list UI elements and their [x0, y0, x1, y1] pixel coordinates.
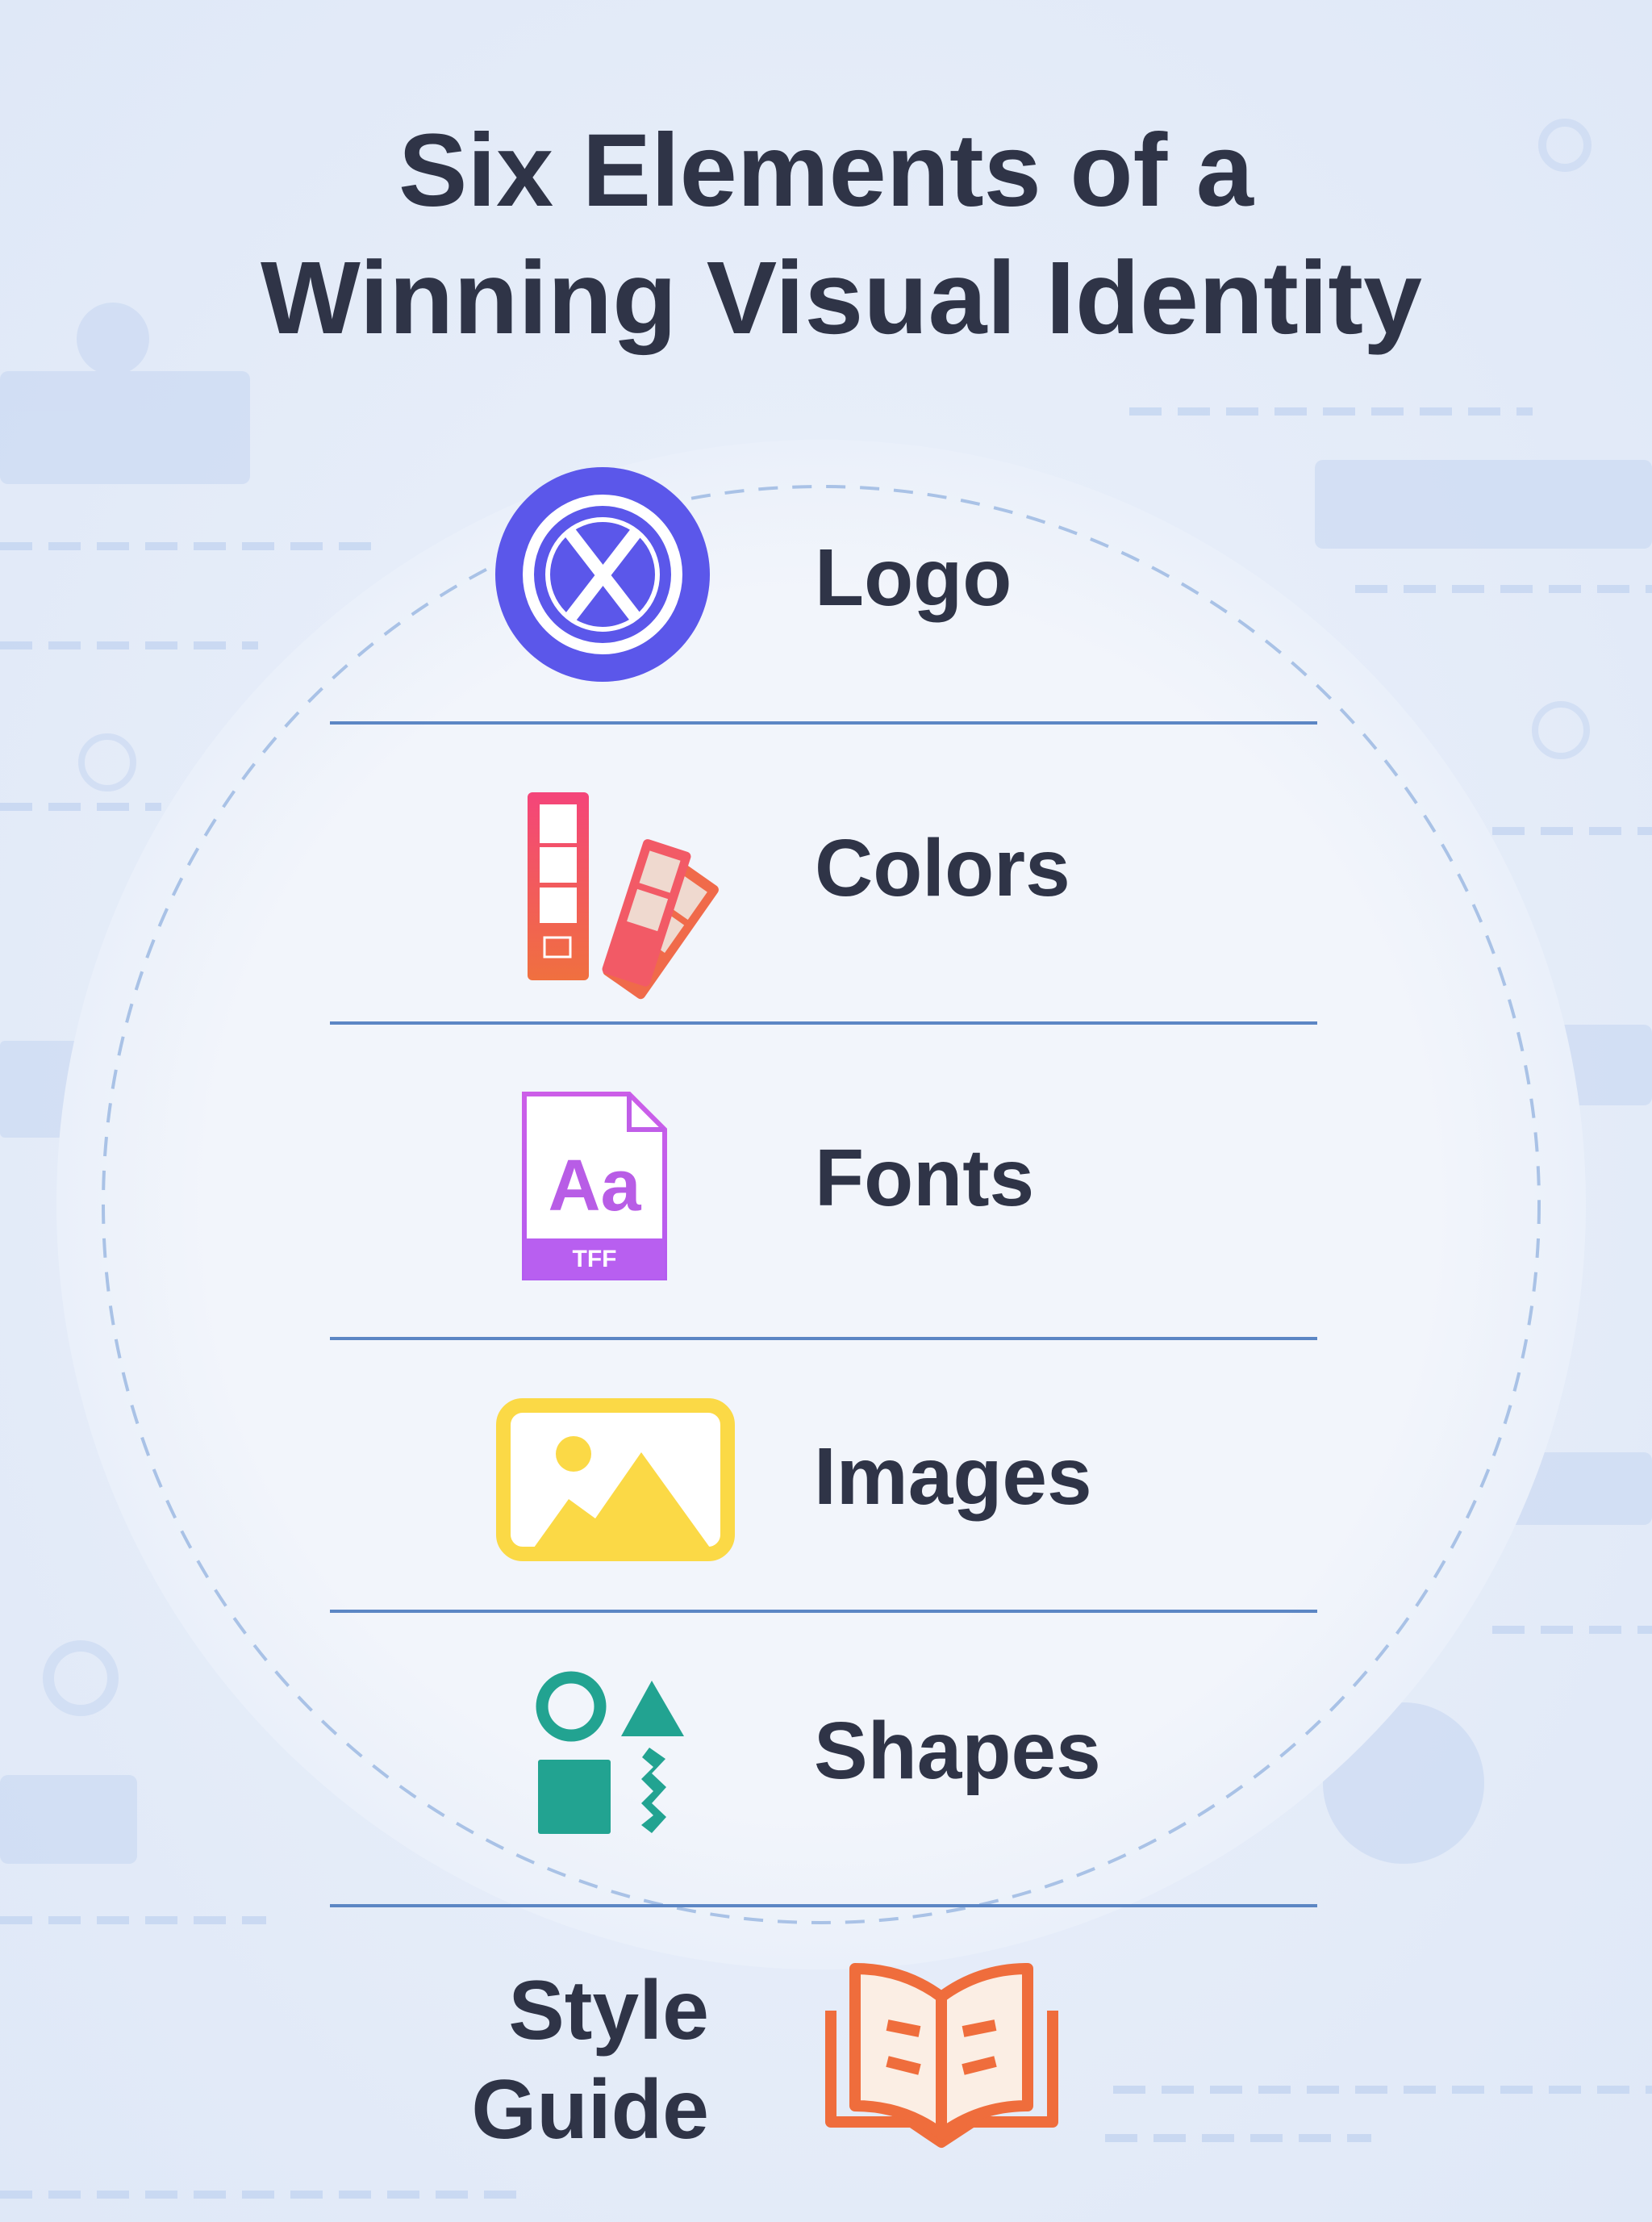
label: Colors: Colors	[815, 823, 1070, 913]
label: Style Guide	[471, 1964, 709, 2157]
icon: font file	[524, 1094, 665, 1279]
icon: book	[831, 1969, 1053, 2142]
dividers	[330, 723, 1317, 1906]
label: Logo: Logo	[815, 533, 1012, 623]
icon: colors fan	[528, 792, 720, 1001]
title	[261, 113, 1422, 356]
title: Winning Visual Identity	[261, 240, 1422, 356]
icon: logo	[495, 467, 710, 682]
icon: font file: Aa	[548, 1146, 641, 1226]
icon: font file: TFF	[573, 1246, 616, 1272]
label: Images: Images	[814, 1431, 1092, 1522]
background circle	[56, 440, 1586, 1969]
label: Style Guide: Style	[508, 1964, 709, 2057]
icon: image	[503, 1405, 728, 1554]
icon: shapes	[538, 1677, 684, 1834]
title: Six Elements of a	[398, 113, 1254, 228]
label: Style Guide: Guide	[471, 2063, 709, 2157]
label: Shapes: Shapes	[814, 1706, 1101, 1796]
label: Fonts: Fonts	[815, 1133, 1034, 1223]
